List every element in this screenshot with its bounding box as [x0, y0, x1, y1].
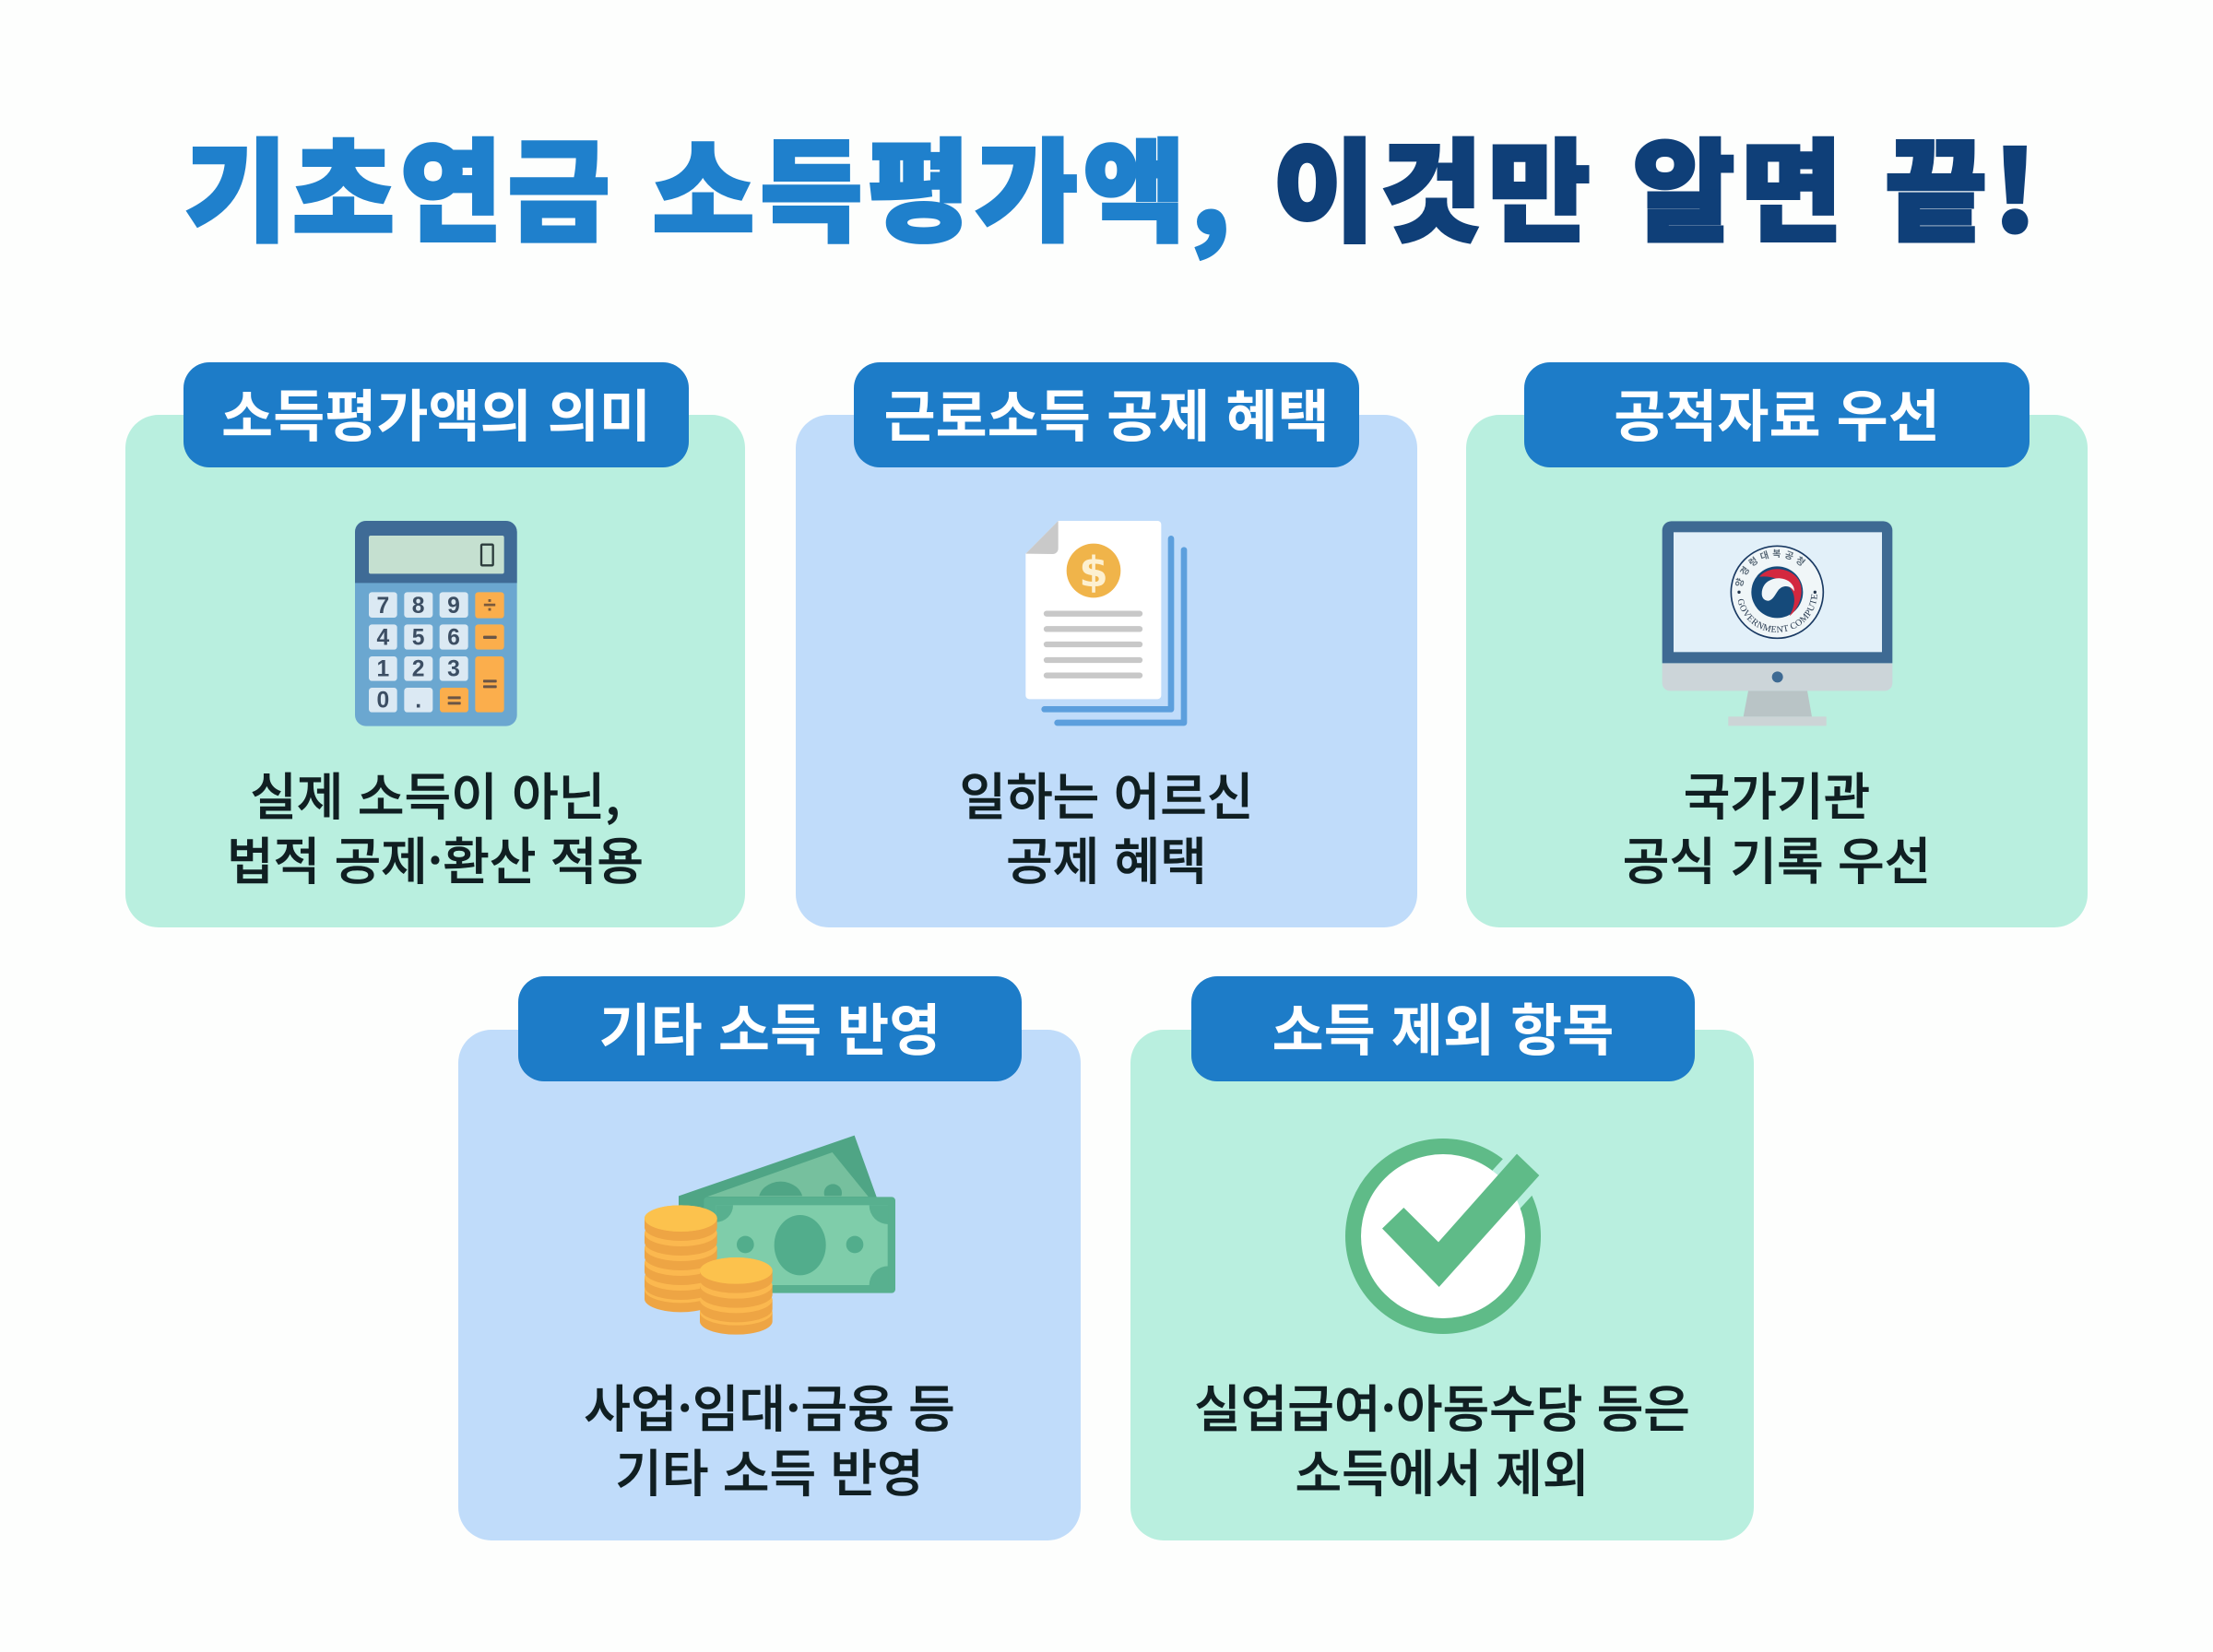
heading: 소득 제외 항목 — [1191, 976, 1695, 1081]
icon: green check mark in circle — [1345, 1139, 1541, 1334]
panel background — [1466, 415, 2088, 927]
icon: calculator: 5 — [412, 626, 425, 651]
text: 국가기관: 국가기관 — [1684, 756, 1870, 830]
icon: calculator — [355, 521, 517, 726]
heading: 소득평가액의 의미 — [183, 362, 689, 467]
panel: 공적자료 우선 — [1466, 362, 2088, 927]
icon: calculator: 8 — [412, 594, 425, 619]
icon: calculator: 7 — [376, 594, 389, 619]
text: 실제 소득이 아닌 — [227, 756, 644, 894]
heading: 소득 제외 항목: 소득 제외 항목 — [1272, 985, 1614, 1067]
panel background — [796, 415, 1417, 927]
text: 사업·임대·금융 등: 기타 소득 반영 — [615, 1433, 924, 1506]
icon: calculator: ÷ — [483, 594, 496, 619]
icon: calculator: 1 — [376, 657, 389, 682]
heading: 공적자료 우선: 공적자료 우선 — [1614, 371, 1940, 453]
text: 실업급여·아동수당 — [1194, 1368, 1690, 1506]
text: 일하는 어르신 — [959, 756, 1254, 894]
text: 일하는 어르신: 공제 혜택 — [1006, 820, 1207, 894]
heading: 기타 소득 반영 — [518, 976, 1022, 1081]
text: 국가기관: 공식 기록 우선 — [1623, 820, 1931, 894]
icon: monitor with government seal — [1662, 521, 1892, 726]
icon: banknotes and coins — [644, 1136, 895, 1335]
panel: 소득 제외 항목 — [1130, 976, 1754, 1540]
text: 실제 소득이 아닌: 실제 소득이 아닌, — [250, 756, 621, 830]
panel background — [458, 1030, 1081, 1540]
panel: 기타 소득 반영 — [458, 976, 1081, 1540]
icon: calculator: . — [415, 689, 421, 714]
text: 실제 소득이 아닌: 법적 공제·환산 적용 — [227, 820, 644, 894]
text: 일하는 어르신: 일하는 어르신 — [959, 756, 1254, 830]
heading: 기타 소득 반영: 기타 소득 반영 — [599, 985, 941, 1067]
icon: calculator: 9 — [447, 594, 460, 619]
heading: 소득평가액의 의미: 소득평가액의 의미 — [221, 371, 651, 453]
icon: calculator: 0 — [376, 689, 389, 714]
heading: 공적자료 우선 — [1524, 362, 2030, 467]
title: 기초연금 소득평가액, 이것만 알면 끝! — [184, 103, 2043, 264]
panel: 근로소득 공제 혜택 — [796, 362, 1417, 927]
icon: calculator: 2 — [412, 657, 425, 682]
text: 실업급여·아동수당: 실업급여·아동수당 등은 — [1194, 1368, 1690, 1442]
icon: monitor with government seal: GOVERNMENT COMPUTE — [1738, 594, 1817, 632]
text: 국가기관 — [1623, 756, 1931, 894]
panel background — [1130, 1030, 1754, 1540]
icon: calculator: 4 — [376, 626, 389, 651]
text: 사업·임대·금융 등: 사업·임대·금융 등 — [584, 1368, 955, 1442]
heading: 근로소득 공제 혜택 — [854, 362, 1359, 467]
text: 사업·임대·금융 등 — [584, 1368, 955, 1506]
icon: calculator: 6 — [447, 626, 460, 651]
panel: 소득평가액의 의미 — [125, 362, 745, 927]
icon: documents with dollar coin — [1025, 521, 1188, 726]
icon: monitor with government seal: 양경렁대복공청 — [1735, 549, 1805, 586]
text: 실업급여·아동수당: 소득에서 제외 — [1295, 1433, 1590, 1506]
heading: 근로소득 공제 혜택: 근로소득 공제 혜택 — [883, 371, 1330, 453]
icon: calculator: 3 — [447, 657, 460, 682]
panel background — [125, 415, 745, 927]
icon: documents with dollar coin: $ — [1079, 548, 1108, 596]
